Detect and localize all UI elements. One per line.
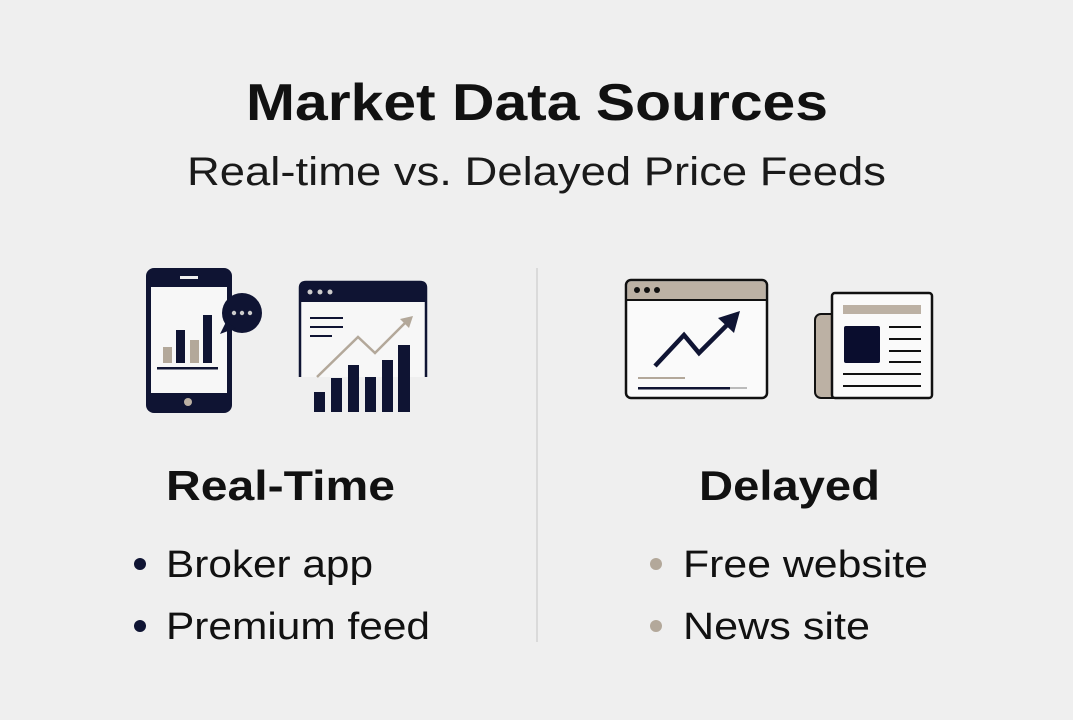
icon: browser with trend arrow	[626, 280, 767, 398]
subtitle: Real-time vs. Delayed Price Feeds	[187, 150, 886, 194]
list: delayed sources: News site	[683, 606, 870, 648]
icon: newspaper	[815, 293, 932, 398]
heading: Delayed: Delayed	[699, 462, 880, 509]
title: Market Data Sources	[246, 74, 828, 132]
list: real-time sources	[134, 544, 430, 648]
list: real-time sources: Broker app	[166, 544, 373, 586]
icon: phone with bar chart	[146, 268, 262, 413]
heading: Real-Time: Real-Time	[166, 462, 395, 509]
list: delayed sources: Free website	[683, 544, 928, 586]
list: real-time sources: Premium feed	[166, 606, 430, 648]
icon: browser with rising chart	[300, 282, 426, 412]
list: delayed sources	[650, 544, 928, 648]
